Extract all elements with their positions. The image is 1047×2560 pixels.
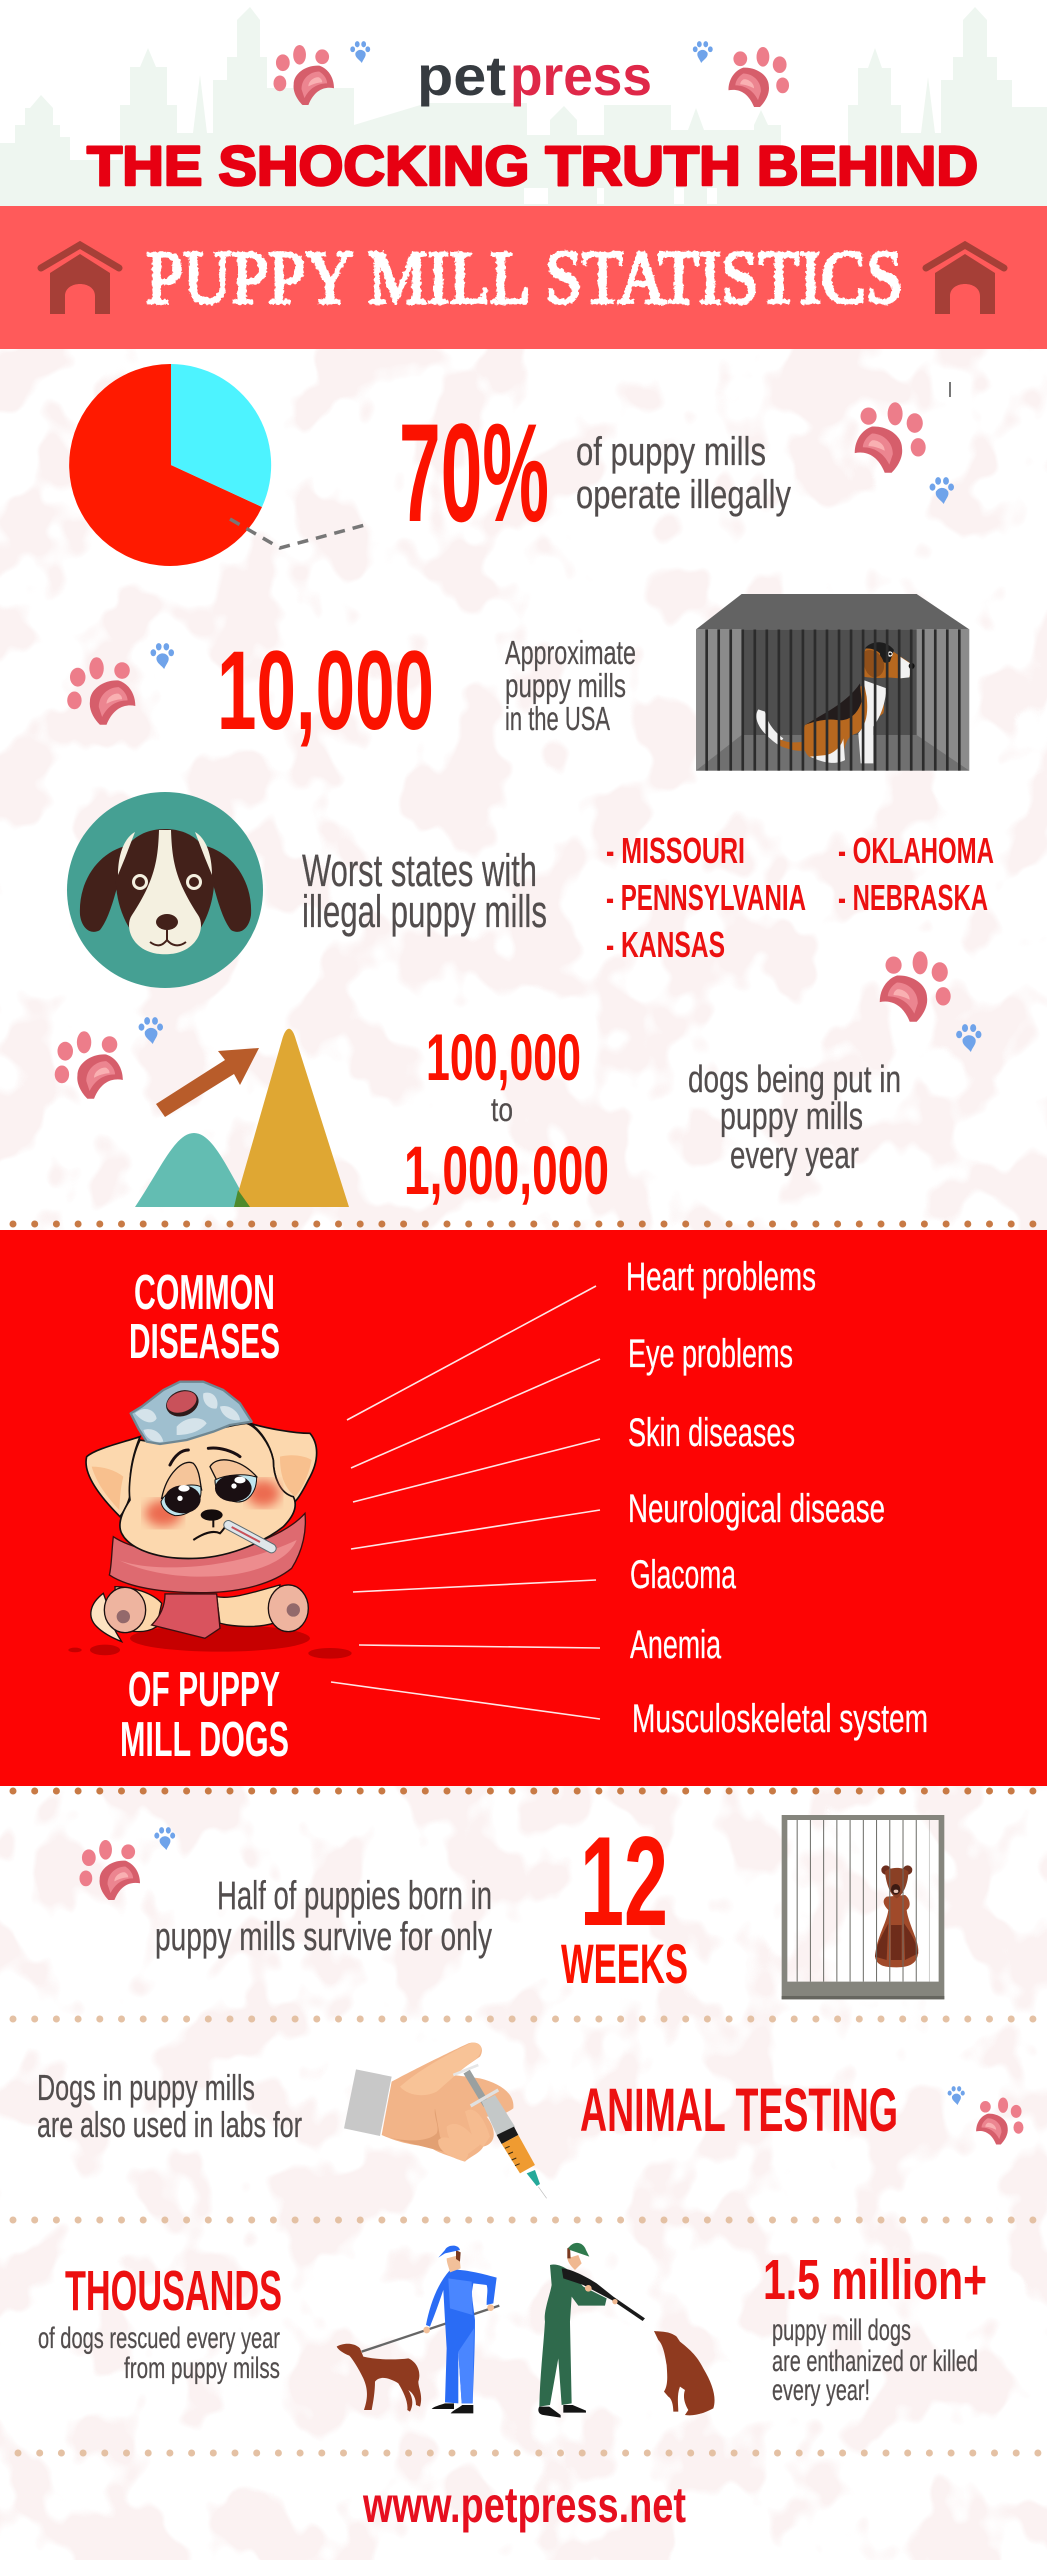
- heading: of puppy mill dogs: OF PUPPY: [128, 1663, 280, 1717]
- city skyline: [0, 7, 1047, 206]
- stat range: to: [491, 1091, 513, 1128]
- icon: paw: [976, 2098, 1023, 2144]
- stat description: Approximate: [505, 634, 636, 671]
- icon: paw: [67, 657, 135, 725]
- icon: paw: [855, 402, 926, 473]
- worst states text: illegal puppy mills: [302, 886, 547, 937]
- panel: rescued and killed: [38, 2243, 987, 2418]
- stat 10,000: 10,000: [217, 628, 434, 753]
- logo: pet: [417, 44, 506, 107]
- heading: of puppy mill dogs: MILL DOGS: [120, 1713, 289, 1767]
- disease list: Musculoskeletal system: [632, 1697, 928, 1741]
- states list: - MISSOURI: [606, 830, 745, 871]
- stat 1.5 million: [763, 2248, 987, 2407]
- disease list: Heart problems: [626, 1255, 816, 1299]
- stat description: every year: [730, 1135, 859, 1177]
- panel: 10,000 mills: [67, 594, 969, 771]
- icon: header paw right: [728, 47, 789, 107]
- title: THE SHOCKING TRUTH BEHIND: [87, 134, 978, 197]
- chart: growth mountains: [135, 1029, 349, 1207]
- stat thousands: from puppy milss: [124, 2352, 280, 2385]
- stat thousands: of dogs rescued every year: [38, 2322, 280, 2355]
- header panel: [0, 7, 1047, 206]
- worst states text: [302, 845, 547, 937]
- icon: header paw left: [273, 45, 334, 105]
- stat 70%: 70%: [399, 394, 549, 551]
- stat description: puppy mills: [720, 1096, 863, 1138]
- icon: caged beagle: [696, 594, 969, 771]
- disease list: Neurological disease: [628, 1487, 885, 1531]
- icon: caged dog: [782, 1815, 944, 1999]
- icon: blue paw: [154, 1827, 175, 1850]
- icon: header blue paw left: [350, 41, 370, 63]
- stat 12 weeks: [561, 1810, 688, 1995]
- stat description: [505, 634, 636, 737]
- stat range: [404, 1020, 609, 1209]
- stat description: puppy mills: [505, 667, 626, 704]
- icon: blue paw: [151, 643, 174, 669]
- stat thousands: THOUSANDS: [65, 2259, 282, 2323]
- connector lines: [331, 1286, 600, 1719]
- disease list: Eye problems: [628, 1332, 793, 1376]
- icon: hand with syringe: [344, 2043, 547, 2198]
- pie chart: [69, 364, 271, 566]
- stat description: of puppy mills: [576, 430, 766, 474]
- icon: blue paw: [139, 1017, 163, 1044]
- description: [155, 1874, 492, 1959]
- description: puppy mills survive for only: [155, 1915, 492, 1959]
- stat 12 weeks: WEEKS: [561, 1932, 688, 1995]
- banner: [0, 206, 1047, 349]
- panel: worst states: [67, 792, 994, 1052]
- panel: dogs put in mills: [55, 1017, 901, 1209]
- icon: dog house right: [926, 245, 1004, 314]
- icon: dog face in teal circle: [67, 792, 263, 988]
- stat 12 weeks: 12: [580, 1810, 668, 1952]
- website footer: www.petpress.net: [362, 2477, 686, 2533]
- panel: 70 percent: [69, 364, 954, 566]
- stat description: dogs being put in: [688, 1059, 901, 1101]
- icon: blue paw: [930, 477, 954, 504]
- disease list: [626, 1255, 928, 1741]
- stat description: [688, 1059, 901, 1177]
- icon: blue paw: [956, 1024, 981, 1052]
- stat 1.5 million: puppy mill dogs: [772, 2314, 911, 2347]
- stat description: operate illegally: [576, 473, 791, 517]
- icon: rescue worker with dog: [337, 2246, 499, 2413]
- disease list: Glacoma: [630, 1553, 736, 1597]
- heading: of puppy mill dogs: [120, 1663, 289, 1767]
- icon: dog house left: [41, 245, 119, 314]
- logo: [417, 44, 652, 107]
- stat thousands: [38, 2259, 282, 2385]
- subtitle: PUPPY MILL STATISTICS: [146, 236, 903, 320]
- stat range: 100,000: [426, 1020, 581, 1094]
- panel: 12 weeks: [79, 1810, 944, 1999]
- icon: header blue paw right: [693, 41, 713, 63]
- stat 1.5 million: every year!: [772, 2374, 870, 2407]
- logo: press: [510, 44, 652, 107]
- description: Half of puppies born in: [217, 1874, 492, 1918]
- icon: paw: [880, 951, 951, 1022]
- heading: common diseases: [129, 1266, 280, 1369]
- states list: [606, 830, 994, 965]
- stat description: [576, 430, 791, 517]
- states list: - KANSAS: [606, 924, 725, 965]
- panel: animal testing: [37, 2043, 1023, 2198]
- icon: paw: [55, 1031, 123, 1099]
- worst states text: Worst states with: [302, 845, 537, 896]
- icon: shooter with dog: [538, 2243, 715, 2418]
- description: [37, 2067, 302, 2145]
- arrow: [156, 1048, 259, 1117]
- callout line: [230, 519, 365, 548]
- stat description: in the USA: [505, 700, 610, 737]
- icon: paw: [79, 1840, 140, 1900]
- stat range: 1,000,000: [404, 1132, 609, 1209]
- description: Dogs in puppy mills: [37, 2067, 255, 2108]
- icon: sick puppy: [68, 1382, 352, 1659]
- heading: common diseases: DISEASES: [129, 1315, 280, 1369]
- icon: blue paw: [948, 2086, 965, 2105]
- disease list: Skin diseases: [628, 1411, 795, 1455]
- disease list: Anemia: [630, 1623, 722, 1667]
- states list: - PENNSYLVANIA: [606, 877, 806, 918]
- description: are also used in labs for: [37, 2104, 302, 2145]
- panel: common diseases: [0, 1230, 1047, 1786]
- heading: common diseases: COMMON: [134, 1266, 275, 1320]
